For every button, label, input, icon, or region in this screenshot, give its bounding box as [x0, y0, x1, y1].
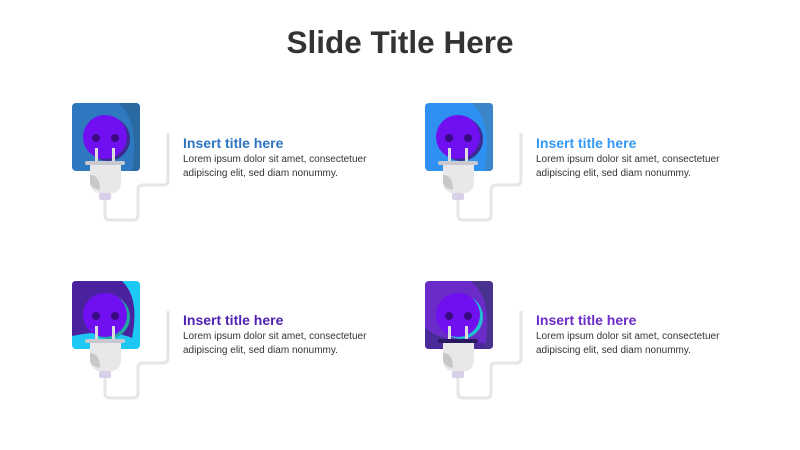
text block 3: Lorem ipsum dolor sit amet, consectetuer — [183, 331, 366, 342]
text block 2 — [536, 135, 720, 178]
icon: plug 4 — [425, 281, 521, 398]
text block 4 — [536, 312, 720, 356]
icon: plug 2 — [425, 103, 521, 220]
text block 2: Lorem ipsum dolor sit amet, consectetuer — [536, 154, 719, 165]
text block 4: Lorem ipsum dolor sit amet, consectetuer — [536, 331, 719, 342]
text block 1: Lorem ipsum dolor sit amet, consectetuer — [183, 154, 366, 165]
text block 4: adipiscing elit, sed diam nonummy. — [536, 344, 691, 356]
text block 3: adipiscing elit, sed diam nonummy. — [183, 344, 338, 356]
text block 3 — [183, 312, 366, 356]
text block 2: Insert title here — [536, 135, 636, 151]
text block 2: adipiscing elit, sed diam nonummy. — [536, 168, 691, 178]
text block 1: Insert title here — [183, 135, 283, 151]
text block 1 — [183, 135, 366, 178]
icon: plug 3 — [72, 281, 168, 398]
title: Slide Title Here — [286, 24, 514, 60]
icon: plug 1 — [72, 103, 168, 220]
text block 1: adipiscing elit, sed diam nonummy. — [183, 168, 338, 178]
text block 4: Insert title here — [536, 312, 636, 328]
text block 3: Insert title here — [183, 312, 283, 328]
